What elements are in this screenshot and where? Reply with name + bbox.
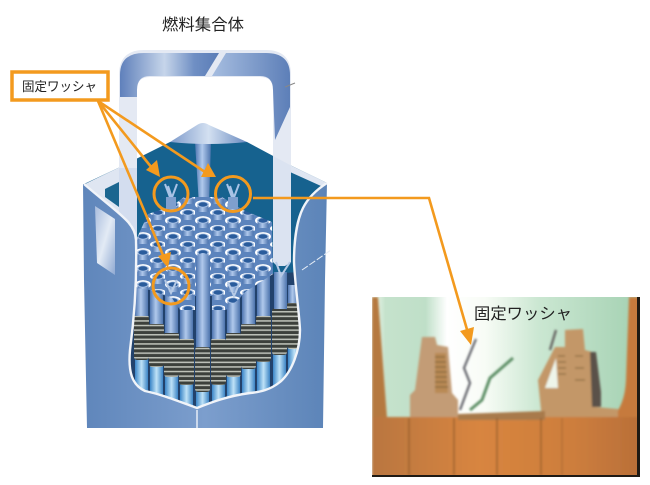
photo right bolt <box>538 329 618 420</box>
left handle leg <box>119 168 137 240</box>
left panel <box>95 206 115 275</box>
photo left bolt <box>410 337 458 417</box>
photo dark edges <box>372 297 640 477</box>
lower bolts and washers <box>165 262 290 296</box>
highlight circles <box>153 176 250 304</box>
callout arrows <box>98 101 468 333</box>
photo of fixing washer <box>372 297 640 477</box>
photo green blurred washer <box>470 358 513 410</box>
title: 燃料集合体 <box>162 16 244 34</box>
photo side walls <box>372 297 387 418</box>
dark window <box>105 182 119 207</box>
photo label: 固定ワッシャ <box>474 305 572 323</box>
label box: 固定ワッシャ <box>22 79 97 94</box>
right handle leg <box>273 156 291 266</box>
front seam highlights <box>197 250 331 428</box>
lower fuel rod ends <box>135 348 296 407</box>
pale upper right wall <box>290 165 327 186</box>
upper bolts and washers <box>165 184 239 209</box>
honeycomb rod tops <box>130 195 275 313</box>
opening interior with fuel rods <box>130 156 299 407</box>
center guide tube <box>196 253 210 347</box>
photo fixing washer strip <box>460 339 476 410</box>
photo orange base <box>372 417 640 477</box>
springs <box>134 302 302 392</box>
fuel assembly illustration <box>83 50 331 428</box>
white rim of cutaway <box>84 183 327 408</box>
label box <box>12 72 108 100</box>
upper fuel rods <box>135 270 298 339</box>
handle <box>119 50 295 170</box>
outer channel box <box>83 183 327 428</box>
arrowheads <box>146 160 474 345</box>
top cone and guide post <box>170 123 247 205</box>
back wall interior <box>84 142 327 300</box>
pale upper left wall <box>85 157 137 236</box>
